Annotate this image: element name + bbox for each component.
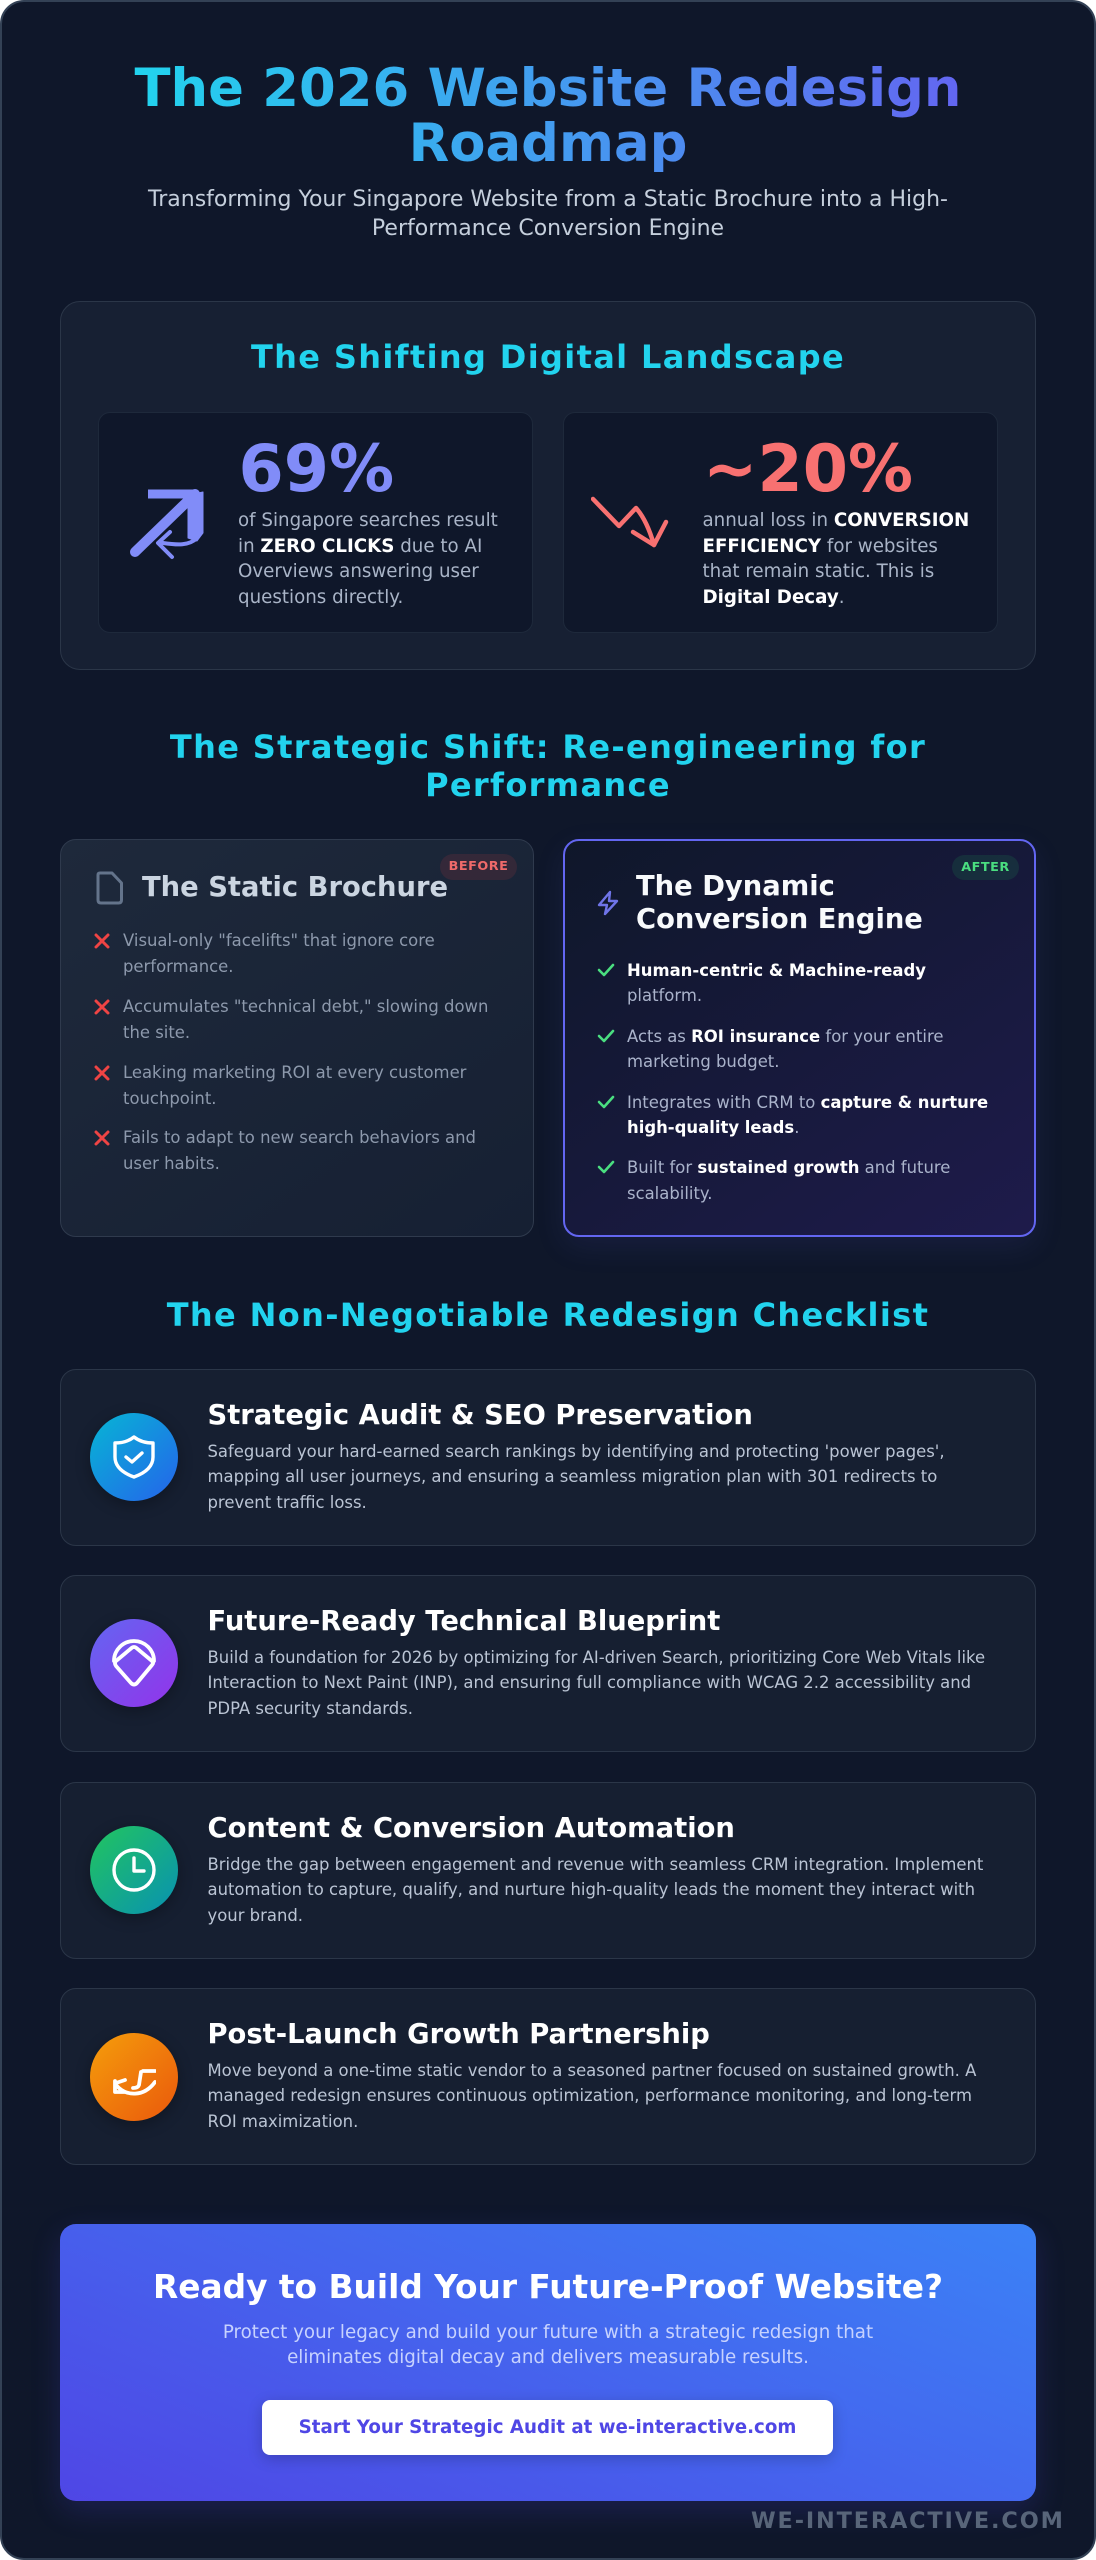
item 4: Fails to adapt to new search behaviors and — [123, 1128, 476, 1147]
stat description: EFFICIENCY for websites — [702, 536, 938, 557]
item 2: Accumulates "technical debt," slowing down — [123, 997, 488, 1016]
panel: dynamic conversion engine (after) — [563, 839, 1036, 1237]
stat number 20%: ~20% — [703, 432, 913, 506]
stat description — [238, 510, 498, 608]
heading: shifting digital landscape: The Shifting Digital Landscape — [251, 338, 845, 376]
stat description: questions directly. — [238, 587, 403, 608]
icon: file — [96, 872, 123, 904]
item 2: the site. — [123, 1023, 190, 1042]
subtitle — [148, 187, 948, 241]
heading: the dynamic conversion engine: The Dynamic — [636, 871, 835, 902]
item 4: user habits. — [123, 1154, 220, 1173]
heading: the dynamic conversion engine: Conversion Engine — [636, 904, 923, 935]
item 2: Acts as ROI insurance for your entire — [627, 1026, 943, 1046]
description: content automation — [208, 1854, 983, 1925]
heading: strategic audit: Strategic Audit & SEO Preservation — [208, 1400, 753, 1431]
heading: the dynamic conversion engine — [636, 871, 923, 935]
cta button — [262, 2400, 833, 2455]
item 1 — [598, 960, 926, 1005]
icon: growth handshake — [90, 2033, 178, 2121]
item 2 — [598, 1026, 943, 1071]
item 3: touchpoint. — [123, 1089, 217, 1108]
description: growth partnership — [208, 2060, 976, 2131]
heading: growth partnership: Post-Launch Growth Partnership — [208, 2019, 710, 2050]
icon: lightning bolt — [598, 890, 618, 916]
subtitle: Performance Conversion Engine — [372, 216, 724, 241]
item 3 — [94, 1063, 466, 1108]
item 3: Integrates with CRM to capture & nurture — [627, 1092, 988, 1112]
cta text: Protect your legacy and build your future with a strategic redesign that — [223, 2322, 873, 2342]
item 3: Leaking marketing ROI at every customer — [123, 1063, 466, 1082]
description: strategic audit: prevent traffic loss. — [208, 1493, 367, 1512]
stat description: that remain static. This is — [702, 561, 934, 582]
stat number 69%: 69% — [238, 432, 394, 506]
badge: after — [952, 855, 1019, 880]
cta text: eliminates digital decay and delivers measurable results. — [287, 2347, 809, 2368]
icon: diamond in circle — [90, 1619, 178, 1707]
item 4 — [598, 1158, 950, 1203]
panel: shifting digital landscape — [60, 301, 1036, 670]
item 3 — [598, 1092, 988, 1137]
subtitle: Transforming Your Singapore Website from a Static Brochure into a High- — [148, 187, 948, 212]
description: technical blueprint — [208, 1648, 985, 1718]
description: growth partnership: ROI maximization. — [208, 2112, 358, 2131]
heading: the static brochure: The Static Brochure — [142, 872, 448, 902]
description: strategic audit: Safeguard your hard-earned search rankings by identifying and protecting 'power pages', — [208, 1442, 945, 1460]
card: technical blueprint — [60, 1575, 1036, 1752]
heading: checklist: The Non-Negotiable Redesign Checklist — [167, 1296, 929, 1334]
icon: trending down — [591, 496, 668, 548]
item 1: Human-centric & Machine-ready — [627, 960, 926, 980]
card: strategic audit — [60, 1369, 1036, 1546]
stat card: 20% — [563, 412, 998, 633]
item 1 — [94, 931, 435, 976]
item 3: high-quality leads. — [627, 1118, 799, 1137]
description: technical blueprint: PDPA security standards. — [208, 1699, 413, 1718]
item 4: scalability. — [627, 1184, 713, 1203]
item 2: marketing budget. — [627, 1052, 779, 1071]
icon: clock — [90, 1826, 178, 1914]
card: growth partnership — [60, 1988, 1036, 2165]
item 1: Visual-only "facelifts" that ignore core — [123, 931, 435, 950]
title: Roadmap — [409, 112, 687, 174]
list: after points — [598, 960, 988, 1203]
heading: content automation: Content & Conversion Automation — [208, 1813, 735, 1844]
stat description: in ZERO CLICKS due to AI — [238, 536, 482, 557]
description: strategic audit: mapping all user journeys, and ensuring a seamless migration plan with 301 redirects to — [208, 1467, 937, 1486]
stat description — [702, 510, 969, 608]
item 1: platform. — [627, 986, 702, 1005]
cta heading: Ready to Build Your Future-Proof Website? — [153, 2268, 943, 2306]
description: content automation: your brand. — [208, 1906, 303, 1925]
description: technical blueprint: Build a foundation for 2026 by optimizing for AI-driven Search, prioritizing Core Web Vitals like — [208, 1648, 985, 1666]
description: technical blueprint: Interaction to Next Paint (INP), and ensuring full compliance with WCAG 2.2 accessibility and — [208, 1673, 971, 1692]
item 4: Built for sustained growth and future — [627, 1158, 950, 1177]
heading: strategic shift — [170, 728, 926, 804]
heading: strategic shift: The Strategic Shift: Re-engineering for — [170, 728, 926, 766]
stat description: Digital Decay. — [702, 587, 845, 608]
list: before points — [94, 931, 488, 1173]
badge: before: BEFORE — [449, 859, 508, 874]
item 4 — [94, 1128, 476, 1173]
badge: before — [440, 854, 517, 880]
stat description: annual loss in CONVERSION — [702, 510, 969, 531]
card: content automation — [60, 1782, 1036, 1959]
cta button: Start Your Strategic Audit at we-interactive.com — [299, 2417, 796, 2438]
stat description: of Singapore searches result — [238, 510, 498, 531]
stat card: 69% — [98, 412, 533, 633]
description: content automation: automation to capture, qualify, and nurture high-quality leads the moment they interact with — [208, 1880, 975, 1899]
item 1: performance. — [123, 957, 234, 976]
stat description: Overviews answering user — [238, 561, 479, 582]
heading: technical blueprint: Future-Ready Technical Blueprint — [208, 1606, 720, 1637]
icon: arrow up right — [130, 489, 204, 560]
item 2 — [94, 997, 488, 1042]
description: strategic audit — [208, 1442, 945, 1512]
footer brand: WE-INTERACTIVE.COM — [751, 2508, 1065, 2534]
call to action panel — [60, 2224, 1036, 2501]
cta text — [223, 2322, 873, 2368]
title: The 2026 Website Redesign — [134, 58, 962, 119]
description: growth partnership: managed redesign ensures continuous optimization, performance monitoring, and long-term — [208, 2086, 972, 2105]
description: content automation: Bridge the gap between engagement and revenue with seamless CRM integration. Implement — [208, 1854, 983, 1874]
heading: strategic shift: Performance — [425, 766, 671, 804]
icon: shield check — [90, 1413, 178, 1501]
badge: after: AFTER — [961, 860, 1010, 875]
title — [100, 62, 996, 179]
panel: static brochure (before) — [60, 839, 534, 1237]
description: growth partnership: Move beyond a one-time static vendor to a seasoned partner focused on sustained growth. A — [208, 2060, 976, 2080]
